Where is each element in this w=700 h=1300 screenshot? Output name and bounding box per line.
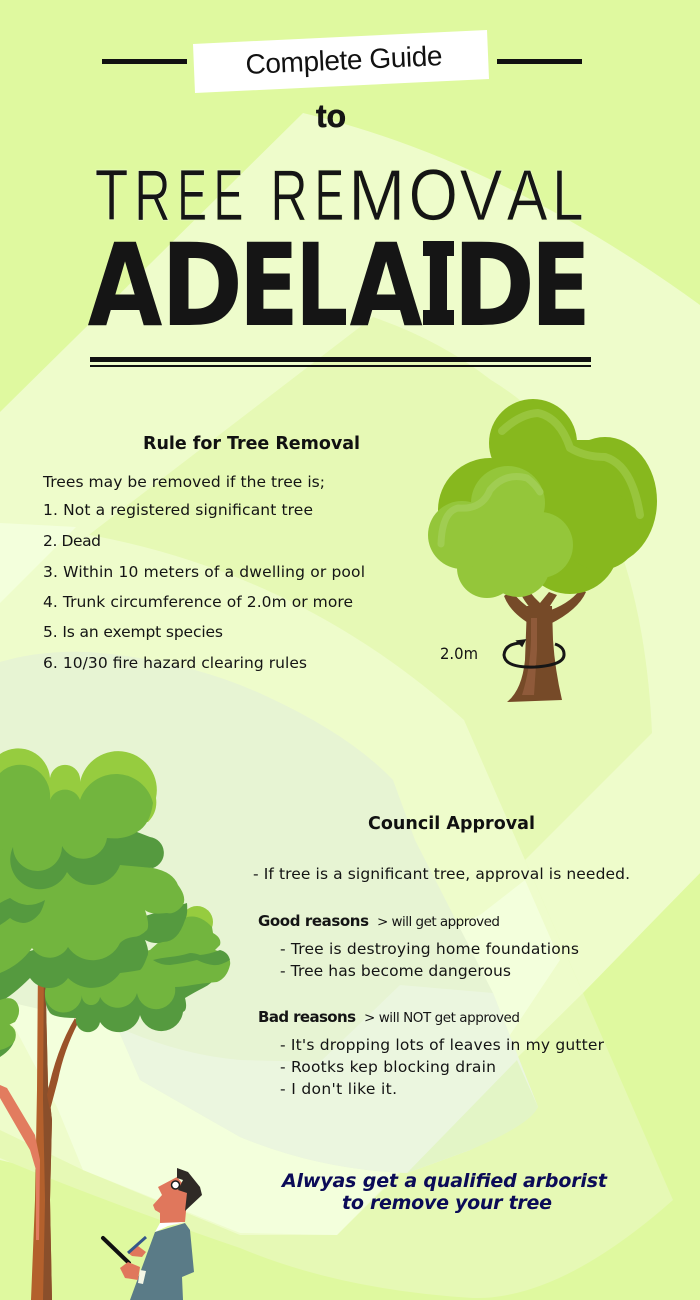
- heading: TREE REMOVAL: T: [95, 155, 128, 236]
- foliage: middle crown: [0, 845, 184, 973]
- lime lobe: [181, 906, 213, 938]
- bad reasons: [258, 1008, 605, 1098]
- rules list: 5. Is an exempt species: [43, 623, 223, 641]
- intro text: Trees may be removed if the tree is;: [42, 473, 325, 491]
- ribbon: Complete Guide: [193, 30, 489, 93]
- neck and face: [153, 1177, 188, 1224]
- heading: TREE REMOVAL: M: [348, 154, 405, 235]
- foliage: lower crown shadow: [0, 903, 187, 1002]
- ribbon: Complete Guide: Complete Guide: [245, 40, 443, 80]
- light crown: [428, 466, 573, 598]
- hair: [177, 1168, 202, 1211]
- heading: TREE REMOVAL: E: [214, 155, 243, 236]
- shirt cuff: [138, 1270, 146, 1284]
- pen: [128, 1237, 146, 1253]
- bad reasons: > will NOT get approved: [364, 1010, 520, 1026]
- section heading: Council Approval: [368, 814, 535, 834]
- heading: ADELAIDE: D: [161, 220, 243, 353]
- heading: TREE REMOVAL: V: [460, 156, 503, 236]
- heading: TREE REMOVAL: R: [270, 156, 308, 236]
- callout: to remove your tree: [342, 1192, 552, 1214]
- rules list: [43, 501, 365, 672]
- heading: TREE REMOVAL: [95, 154, 584, 236]
- rules list: 1. Not a registered significant tree: [43, 501, 313, 519]
- foliage: upper crown shadow: [10, 830, 164, 889]
- heading: TREE REMOVAL: A: [507, 156, 548, 236]
- panel: rule for tree removal: [42, 434, 365, 672]
- crown highlight: [502, 413, 640, 515]
- shadow band: [153, 950, 230, 965]
- panel: council approval: [253, 814, 630, 1214]
- glasses: [172, 1181, 180, 1189]
- good reasons: Good reasons: [258, 912, 369, 930]
- rules list: 4. Trunk circumference of 2.0m or more: [43, 593, 353, 611]
- jacket: [130, 1223, 194, 1300]
- dark crown: [438, 399, 657, 594]
- foliage: inner shadow: [0, 898, 45, 925]
- foliage: right lower cluster: [45, 906, 230, 1032]
- good reasons: - Tree has become dangerous: [280, 962, 511, 980]
- heading: ADELAIDE: E: [531, 220, 591, 352]
- good reasons: > will get approved: [377, 914, 500, 930]
- rules list: 2. Dead: [43, 532, 101, 550]
- bad reasons: - Rootks kep blocking drain: [280, 1058, 496, 1076]
- word: to: to: [316, 98, 346, 134]
- double rule under title: [90, 357, 591, 367]
- heading: ADELAIDE: A: [350, 219, 423, 352]
- heading: ADELAIDE: D: [453, 220, 535, 353]
- bad reasons: - I don't like it.: [280, 1080, 397, 1098]
- section heading: Rule for Tree Removal: [143, 434, 360, 454]
- heading: ADELAIDE: A: [88, 219, 163, 352]
- foliage: lower left cluster: [0, 998, 19, 1057]
- decorative right line beside the ribbon: [497, 59, 582, 64]
- rules list: 6. 10/30 fire hazard clearing rules: [43, 654, 307, 672]
- heading: TREE REMOVAL: L: [552, 155, 584, 236]
- upper hand: [128, 1246, 146, 1257]
- heading: ADELAIDE: [88, 219, 591, 353]
- light crown highlight: [441, 476, 540, 544]
- illustration: large tree: [0, 748, 230, 1300]
- icon: circular arrow around trunk: [504, 640, 564, 667]
- label: 2.0m: 2.0m: [440, 644, 478, 663]
- foliage: upper crown: [0, 765, 153, 871]
- heading: ADELAIDE: I: [422, 220, 455, 353]
- mid green: [45, 916, 230, 1013]
- icon: tree with trunk measurement: [428, 399, 657, 702]
- callout: [280, 1170, 608, 1214]
- shirt collar: [155, 1222, 185, 1232]
- heading: TREE REMOVAL: E: [177, 155, 207, 236]
- clipboard: [103, 1238, 129, 1263]
- good reasons: [258, 912, 579, 980]
- approval statement: - If tree is a significant tree, approval is needed.: [253, 865, 630, 883]
- bad reasons: Bad reasons: [258, 1008, 356, 1026]
- trunk and branches: [0, 960, 78, 1300]
- heading: TREE REMOVAL: O: [409, 156, 458, 236]
- tree trunk and branches: [504, 580, 586, 702]
- bad reasons: - It's dropping lots of leaves in my gutter: [280, 1036, 605, 1054]
- shadow: [45, 950, 217, 1032]
- heading: TREE REMOVAL: R: [134, 156, 171, 236]
- illustration: man with clipboard: [103, 1168, 202, 1300]
- rules list: 3. Within 10 meters of a dwelling or pool: [43, 563, 365, 581]
- lower hand: [120, 1262, 140, 1280]
- good reasons: - Tree is destroying home foundations: [280, 940, 579, 958]
- callout: Alwyas get a qualified arborist: [280, 1170, 608, 1192]
- heading: ADELAIDE: E: [239, 220, 299, 352]
- decorative left line beside the ribbon: [102, 59, 187, 64]
- foliage: lime top lobes: [0, 748, 157, 822]
- title block: [88, 30, 591, 367]
- heading: ADELAIDE: L: [295, 219, 348, 352]
- heading: TREE REMOVAL: E: [315, 155, 344, 236]
